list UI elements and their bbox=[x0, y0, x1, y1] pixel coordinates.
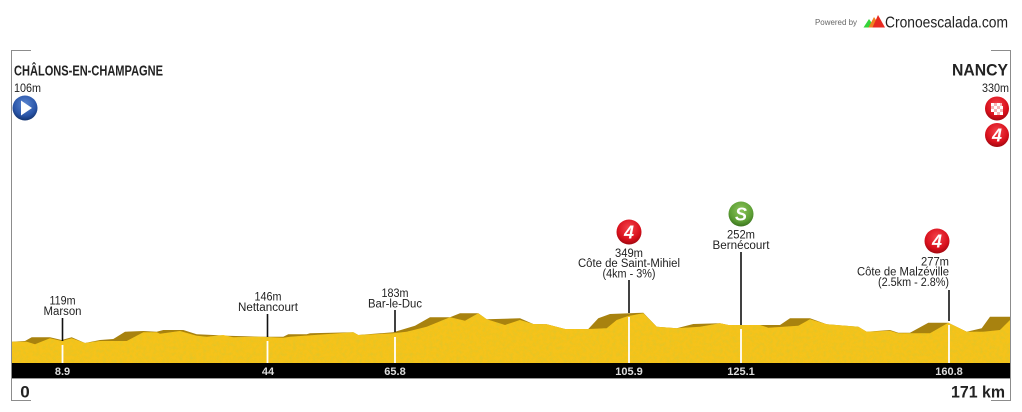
point: Marson bbox=[44, 296, 82, 378]
elevation profile bbox=[12, 313, 1010, 363]
climb: Côte de Saint-Mihiel: (4km - 3%) bbox=[602, 268, 656, 280]
sprint: Bernécourt bbox=[712, 202, 770, 378]
point: Bar-le-Duc bbox=[368, 288, 422, 378]
logo: Powered by Cronoescalada: Powered by bbox=[815, 18, 857, 27]
finish distance: 171 km bbox=[951, 382, 1005, 402]
climb: Côte de Malzéville: Côte de Malzéville bbox=[857, 266, 949, 278]
start marker: Châlons-en-Champagne bbox=[12, 62, 163, 120]
start marker: Châlons-en-Champagne: 106m bbox=[14, 83, 41, 95]
finish marker: Nancy: 330m bbox=[982, 83, 1009, 95]
climb: Côte de Saint-Mihiel: 4 bbox=[623, 222, 634, 242]
climb: Côte de Malzéville: 160.8 bbox=[935, 366, 963, 378]
sprint: Bernécourt: S bbox=[735, 204, 747, 224]
yellow profile bbox=[12, 313, 1010, 363]
start distance: 0 bbox=[20, 382, 30, 402]
point: Nettancourt: 44 bbox=[262, 366, 275, 378]
logo: Powered by Cronoescalada: Cronoescalada.com bbox=[885, 14, 1008, 32]
point: Bar-le-Duc: 183m bbox=[382, 288, 408, 300]
climb: Côte de Saint-Mihiel: 349m bbox=[615, 248, 643, 260]
point: Bar-le-Duc: Bar-le-Duc bbox=[368, 298, 422, 310]
point: Marson: 119m bbox=[50, 296, 76, 308]
point: Marson: Marson bbox=[44, 306, 82, 318]
point: Nettancourt bbox=[238, 292, 299, 378]
logo: Powered by Cronoescalada bbox=[815, 14, 1008, 32]
start marker: Châlons-en-Champagne: CHÂLONS-EN-CHAMPAGNE bbox=[14, 62, 163, 80]
finish marker: Nancy: NANCY bbox=[952, 60, 1009, 80]
climb: Côte de Saint-Mihiel: Côte de Saint-Mihiel bbox=[578, 258, 680, 270]
finish marker: Nancy bbox=[952, 60, 1009, 147]
dark climb shading bbox=[12, 313, 1010, 363]
point: Marson: 8.9 bbox=[55, 366, 70, 378]
point: Nettancourt: 146m bbox=[254, 292, 282, 304]
finish marker: Nancy: 4 bbox=[991, 126, 1002, 146]
climb: Côte de Malzéville: 4 bbox=[931, 232, 942, 252]
climb: Côte de Saint-Mihiel: 105.9 bbox=[615, 366, 643, 378]
distance bar bbox=[12, 363, 1010, 378]
point: Nettancourt: Nettancourt bbox=[238, 302, 299, 314]
climb: Côte de Malzéville: 277m bbox=[921, 256, 949, 268]
climb: Côte de Saint-Mihiel bbox=[578, 220, 680, 378]
sprint: Bernécourt: Bernécourt bbox=[712, 240, 770, 252]
point: Bar-le-Duc: 65.8 bbox=[384, 366, 406, 378]
sprint: Bernécourt: 252m bbox=[727, 230, 755, 242]
climb: Côte de Malzéville bbox=[857, 228, 963, 378]
sprint: Bernécourt: 125.1 bbox=[727, 366, 755, 378]
climb: Côte de Malzéville: (2.5km - 2.8%) bbox=[878, 277, 949, 289]
